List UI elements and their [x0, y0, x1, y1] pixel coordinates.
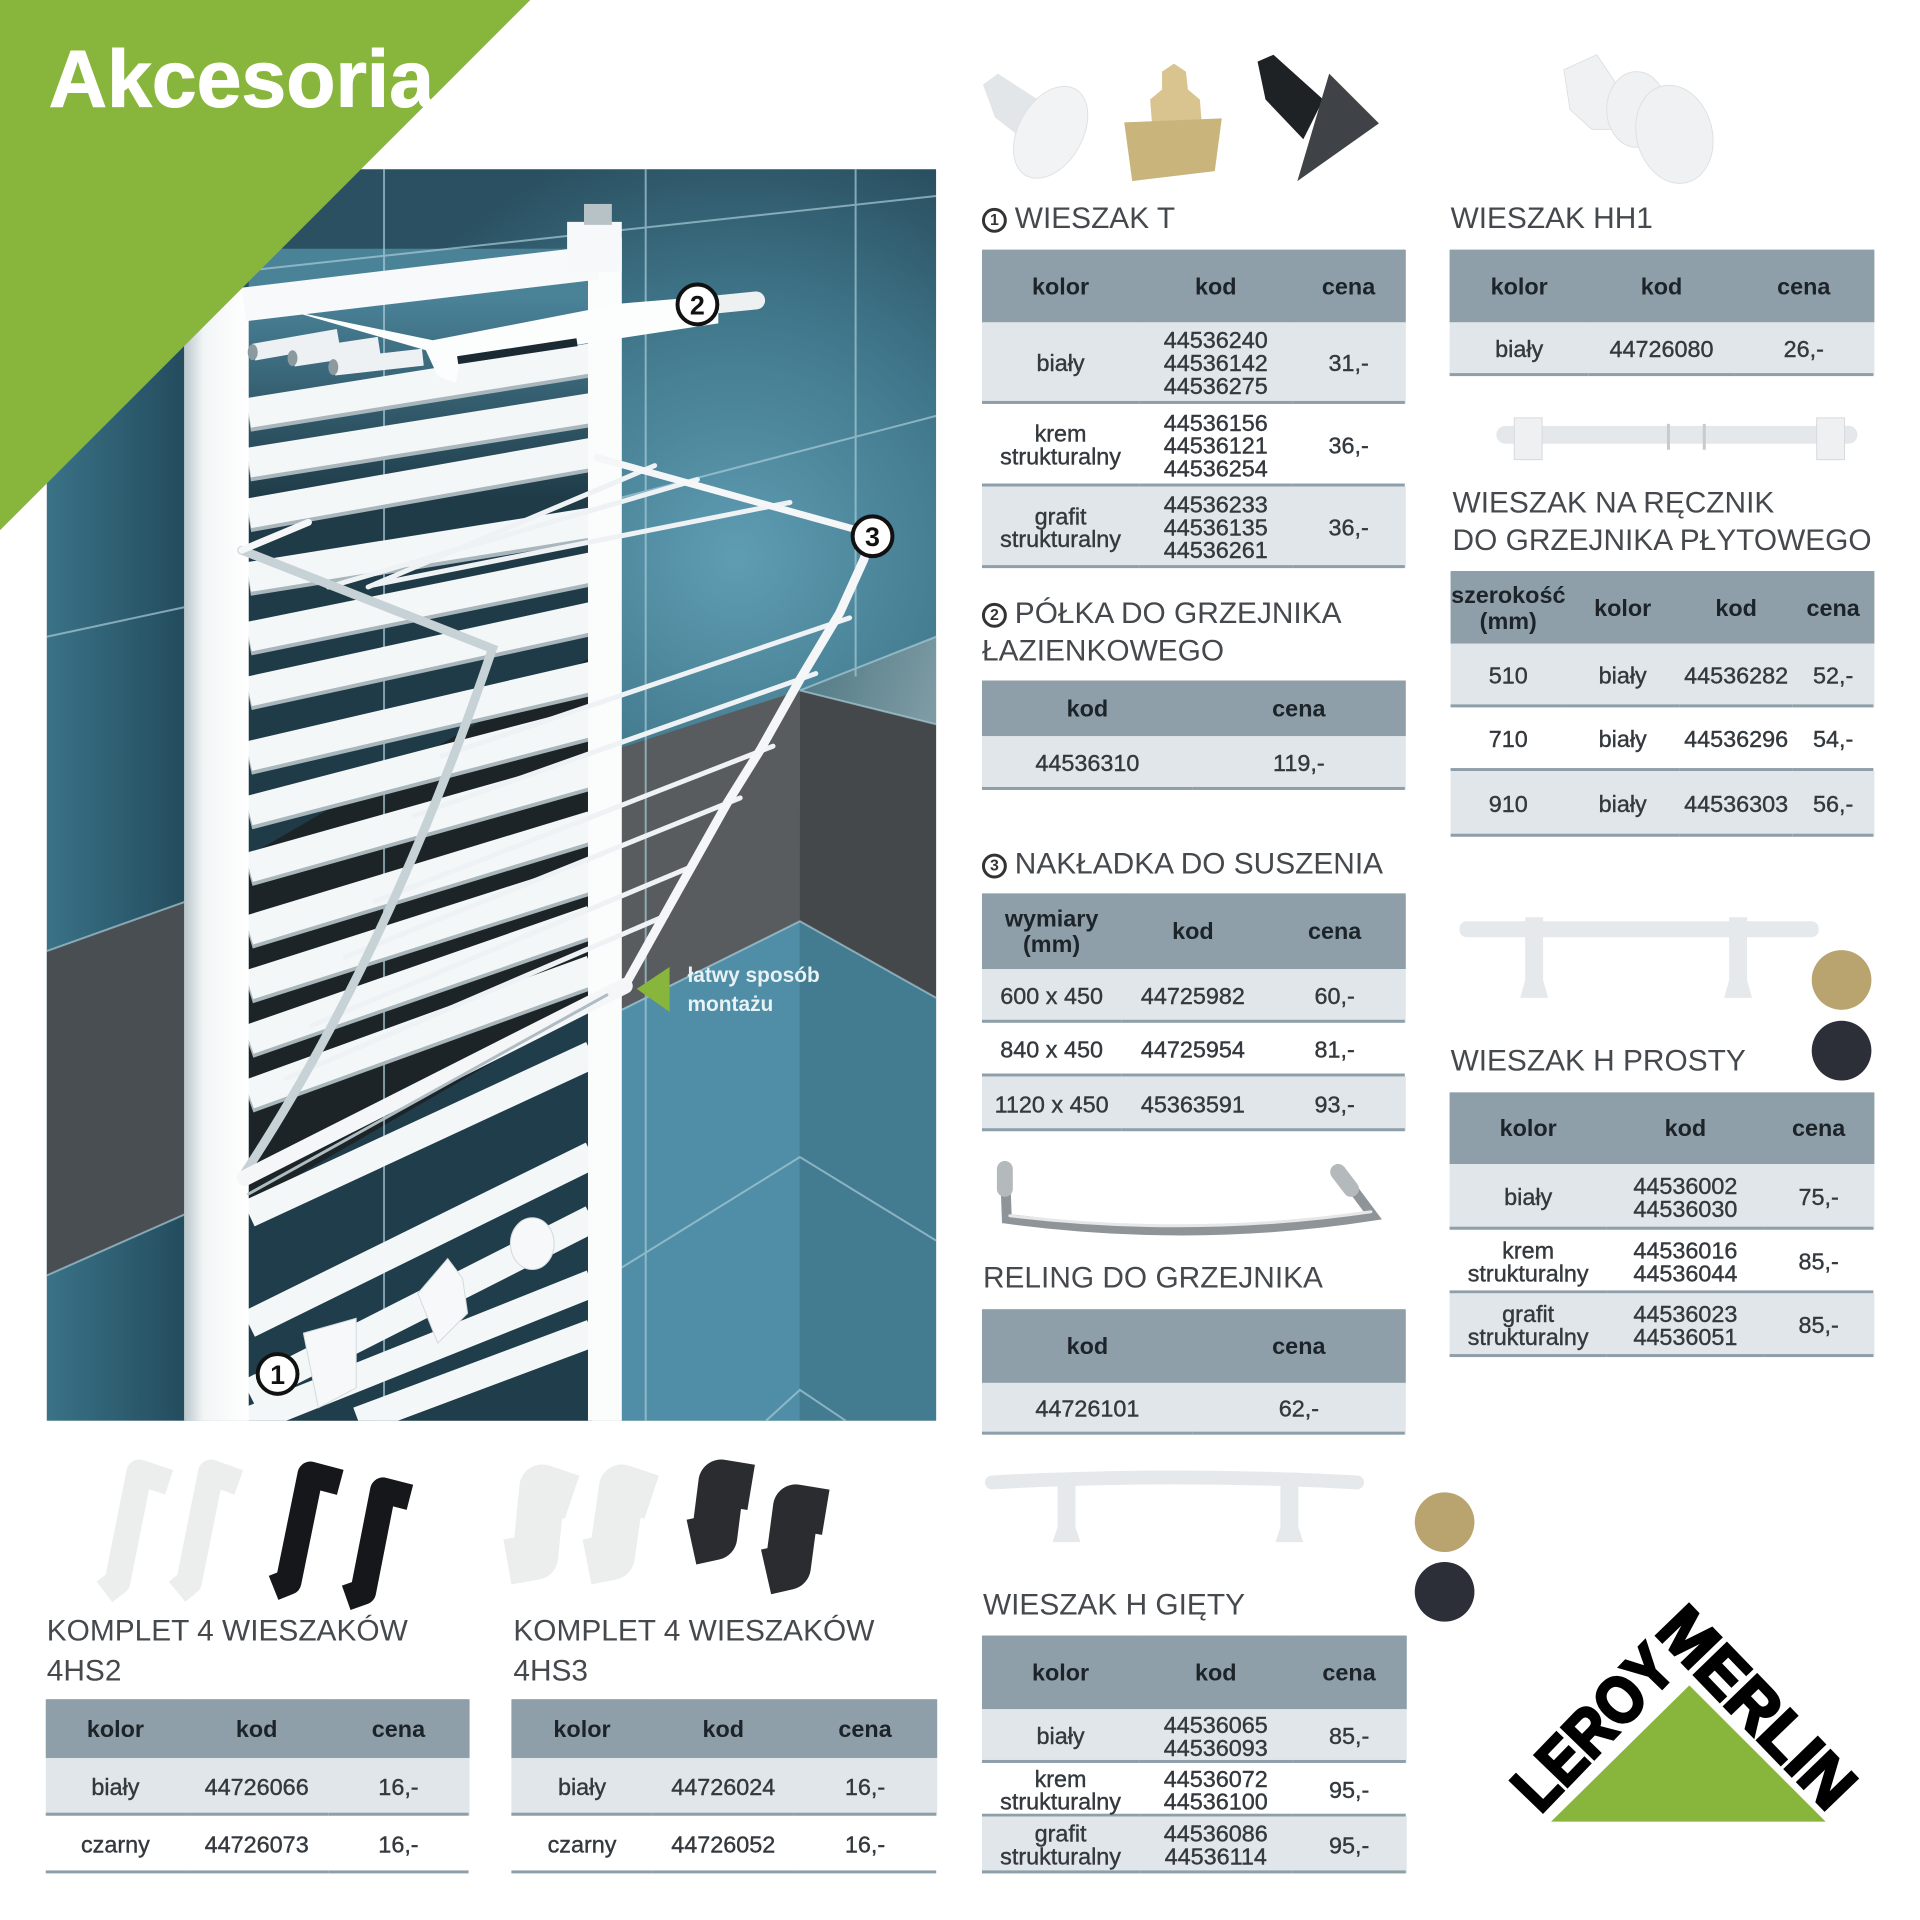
table: Wieszak na ręcznik: szerokość — [1451, 582, 1565, 607]
table: Wieszak na ręcznik: kolor — [1594, 594, 1651, 620]
icon: curved H hanger — [992, 1472, 1357, 1542]
table: Wieszak H prosty: 44536030 — [1633, 1195, 1737, 1221]
table: Wieszak na ręcznik: 56,- — [1813, 791, 1853, 817]
table: Komplet 4HS2: kolor — [87, 1716, 144, 1742]
logo: Leroy Merlin: MERLIN — [1643, 1592, 1870, 1823]
icon: white T hanger — [983, 73, 1103, 191]
table: Reling do grzejnika: kod — [1067, 1333, 1108, 1359]
table: Wieszak T: 44536233 — [1164, 491, 1268, 517]
drying rack — [242, 458, 873, 1194]
table: Wieszak T: kod — [1195, 273, 1237, 299]
table: Wieszak T: strukturalny — [1000, 526, 1121, 552]
table: Nakładka do suszenia: 81,- — [1315, 1037, 1355, 1063]
heading: Wieszak HH1: WIESZAK HH1 — [1451, 202, 1653, 235]
table: Wieszak T: 31,- — [1328, 350, 1369, 376]
icon: chrome rail — [1005, 1166, 1373, 1230]
table: Wieszak T — [982, 250, 1406, 568]
table: Wieszak H prosty — [1450, 1092, 1874, 1358]
icon: straight H hanger — [1460, 917, 1819, 998]
table: Komplet 4HS3 — [511, 1699, 938, 1874]
table: Nakładka do suszenia: (mm) — [1023, 931, 1080, 957]
table: Wieszak H gięty: kolor — [1032, 1659, 1089, 1685]
table: Komplet 4HS2: cena — [372, 1716, 425, 1742]
marker 3: 3 — [865, 522, 880, 552]
heading: Wieszak H prosty: WIESZAK H PROSTY — [1451, 1045, 1746, 1077]
table: Wieszak na ręcznik: 54,- — [1813, 726, 1853, 752]
icon: graphite T hanger — [1258, 55, 1379, 181]
table: Wieszak H prosty: 44536002 — [1633, 1172, 1737, 1198]
table: Komplet 4HS2: 16,- — [378, 1774, 419, 1800]
table: Wieszak H gięty: 44536072 — [1164, 1765, 1268, 1791]
table: Komplet 4HS2: kod — [236, 1716, 277, 1742]
table: Wieszak T: 44536261 — [1164, 537, 1268, 563]
table: Półka — [982, 680, 1406, 790]
table: Wieszak na ręcznik: (mm) — [1480, 607, 1537, 633]
table: Wieszak na ręcznik: 910 — [1489, 791, 1528, 817]
table: Wieszak H prosty: cena — [1792, 1115, 1845, 1141]
table: Komplet 4HS3: 44726052 — [671, 1832, 775, 1857]
heading: Wieszak T: WIESZAK T — [1015, 202, 1175, 235]
table: Wieszak H gięty: strukturalny — [1000, 1844, 1121, 1869]
table: Wieszak H prosty: 85,- — [1799, 1249, 1839, 1274]
table: Wieszak na ręcznik: cena — [1806, 594, 1860, 620]
table: Komplet 4HS2: 16,- — [378, 1832, 419, 1857]
table: Wieszak HH1: cena — [1777, 273, 1830, 299]
table: Komplet 4HS3: 16,- — [845, 1832, 885, 1857]
table: Półka: cena — [1272, 695, 1325, 721]
table: Wieszak H prosty: grafit — [1502, 1301, 1554, 1327]
table: Komplet 4HS2: biały — [91, 1774, 139, 1800]
table: Wieszak HH1: 26,- — [1784, 336, 1824, 362]
hangers on radiator — [303, 1218, 554, 1408]
marker 2 — [678, 285, 717, 324]
table: Nakładka do suszenia: cena — [1308, 918, 1361, 944]
table: Wieszak H gięty: strukturalny — [1000, 1788, 1121, 1814]
table: Wieszak H prosty: 75,- — [1799, 1184, 1839, 1210]
table: Wieszak na ręcznik: biały — [1599, 791, 1647, 817]
table: Komplet 4HS2: czarny — [81, 1832, 150, 1857]
table: Komplet 4HS2: 44726073 — [205, 1832, 309, 1857]
table: Wieszak H prosty: krem — [1502, 1237, 1554, 1263]
table: Wieszak H gięty: 85,- — [1329, 1723, 1369, 1749]
table: Wieszak na ręcznik — [1450, 571, 1874, 837]
table: Wieszak H prosty: 44536044 — [1633, 1260, 1737, 1286]
table: Wieszak T: krem — [1035, 421, 1087, 447]
icon: 4HS2 hooks — [104, 1472, 410, 1598]
table: Wieszak H gięty: 44536065 — [1164, 1712, 1268, 1738]
callout: easy mounting — [637, 964, 820, 1016]
table: Wieszak HH1: kolor — [1491, 273, 1548, 299]
heading: Komplet 4HS2 — [47, 1614, 408, 1687]
table: Wieszak H prosty: biały — [1504, 1184, 1552, 1210]
table: Wieszak na ręcznik: 52,- — [1813, 663, 1853, 688]
table: Nakładka do suszenia: wymiary — [1005, 905, 1098, 931]
heading: Komplet 4HS2: KOMPLET 4 WIESZAKÓW — [47, 1615, 408, 1648]
marker 1: 1 — [270, 1360, 285, 1390]
table: Wieszak H prosty: strukturalny — [1468, 1260, 1589, 1286]
table: Wieszak T: kolor — [1032, 273, 1089, 299]
heading: Wieszak na ręcznik — [1452, 487, 1872, 557]
table: Nakładka do suszenia — [982, 893, 1406, 1132]
table: Wieszak HH1: kod — [1641, 273, 1682, 299]
table: Wieszak H gięty: 95,- — [1329, 1777, 1369, 1803]
marker 2: 2 — [690, 290, 705, 320]
icon: HH1 white hanger — [1564, 55, 1724, 192]
table: Komplet 4HS3: biały — [558, 1774, 606, 1800]
table: Komplet 4HS3: kod — [703, 1716, 744, 1742]
table: Wieszak na ręcznik: 710 — [1489, 726, 1528, 752]
table: Wieszak T: 44536275 — [1164, 373, 1268, 399]
table: Wieszak H gięty: 44536093 — [1164, 1735, 1268, 1760]
table: Wieszak na ręcznik: 510 — [1489, 663, 1528, 688]
table: Komplet 4HS3: 44726024 — [671, 1774, 775, 1800]
table: Wieszak H gięty: biały — [1037, 1723, 1085, 1749]
table: Wieszak na ręcznik: 44536303 — [1684, 791, 1788, 817]
title: Akcesoria — [49, 35, 434, 124]
table: Wieszak na ręcznik: biały — [1599, 726, 1647, 752]
shelf — [248, 295, 756, 383]
table: Wieszak H gięty: cena — [1322, 1659, 1376, 1685]
table: Komplet 4HS3: cena — [838, 1716, 892, 1742]
heading: Reling do grzejnika: RELING DO GRZEJNIKA — [983, 1262, 1323, 1294]
heading: Półka: ŁAZIENKOWEGO — [982, 635, 1224, 668]
table: Półka: 119,- — [1273, 750, 1325, 776]
table: Wieszak H prosty: 44536023 — [1633, 1301, 1737, 1327]
table: Wieszak H prosty: 44536051 — [1633, 1324, 1737, 1350]
heading: Wieszak H gięty: WIESZAK H GIĘTY — [983, 1589, 1245, 1622]
table: Komplet 4HS2 — [46, 1699, 470, 1874]
heading: Komplet 4HS2: 4HS2 — [47, 1655, 121, 1687]
heading: Komplet 4HS3: KOMPLET 4 WIESZAKÓW — [513, 1615, 874, 1648]
table: Wieszak T: 36,- — [1328, 432, 1369, 458]
table: Wieszak na ręcznik: kod — [1715, 594, 1757, 620]
table: Nakładka do suszenia: 840 x 450 — [1000, 1037, 1103, 1063]
heading: Wieszak na ręcznik: WIESZAK NA RĘCZNIK — [1453, 487, 1774, 519]
table: Wieszak T: cena — [1322, 273, 1375, 299]
table: Wieszak na ręcznik: 44536282 — [1684, 663, 1788, 688]
table: Reling do grzejnika: 62,- — [1279, 1396, 1319, 1422]
radiator — [184, 204, 622, 1423]
swatches: curved H hanger colours — [1415, 1492, 1474, 1622]
table: Nakładka do suszenia: 44725954 — [1141, 1037, 1245, 1063]
table: Wieszak H gięty: 44536100 — [1164, 1788, 1268, 1814]
heading: Półka: 2 — [990, 607, 999, 624]
icon: cream T hanger — [1124, 64, 1222, 181]
heading: Nakładka do suszenia: NAKŁADKA DO SUSZENIA — [1015, 848, 1383, 880]
table: Wieszak H gięty: 44536114 — [1165, 1844, 1267, 1869]
table: Wieszak H gięty: 95,- — [1329, 1832, 1369, 1858]
table: Wieszak T: strukturalny — [1000, 444, 1121, 470]
table: Wieszak H prosty: strukturalny — [1468, 1324, 1589, 1350]
table: Wieszak na ręcznik: biały — [1599, 663, 1647, 688]
table: Wieszak HH1: biały — [1495, 336, 1543, 362]
heading: Półka: PÓŁKA DO GRZEJNIKA — [1015, 597, 1342, 630]
table: Wieszak T: biały — [1037, 350, 1085, 376]
table: Wieszak H gięty: kod — [1195, 1659, 1237, 1685]
table: Komplet 4HS3: kolor — [553, 1716, 611, 1742]
marker 3 — [853, 516, 892, 556]
table: Wieszak T: 44536121 — [1164, 432, 1268, 458]
table: Wieszak T: 36,- — [1328, 514, 1369, 540]
table: Nakładka do suszenia: 1120 x 450 — [995, 1091, 1109, 1117]
heading: Komplet 4HS3 — [513, 1614, 874, 1687]
heading: Wieszak na ręcznik: DO GRZEJNIKA PŁYTOWEGO — [1453, 524, 1872, 557]
table: Komplet 4HS3: 16,- — [845, 1774, 885, 1800]
heading: Wieszak T: 1 — [990, 212, 999, 229]
swatches: straight H hanger colours — [1812, 950, 1871, 1080]
table: Reling do grzejnika: cena — [1272, 1333, 1325, 1359]
table: Reling do grzejnika: 44726101 — [1035, 1396, 1139, 1422]
callout: easy mounting: łatwy sposób — [687, 964, 820, 987]
table: Wieszak H gięty — [982, 1636, 1407, 1874]
table: Wieszak H prosty: kod — [1665, 1115, 1706, 1141]
table: Wieszak H prosty: 44536016 — [1633, 1237, 1737, 1263]
table: Wieszak HH1: 44726080 — [1609, 336, 1713, 362]
icon: 4HS3 hooks — [507, 1482, 826, 1572]
table: Wieszak H prosty: 85,- — [1799, 1312, 1839, 1338]
table: Komplet 4HS2: 44726066 — [205, 1774, 309, 1800]
table: Półka: 44536310 — [1035, 750, 1139, 776]
heading: Półka — [982, 597, 1342, 668]
table: Nakładka do suszenia: 93,- — [1315, 1091, 1355, 1117]
table: Wieszak H gięty: grafit — [1035, 1821, 1087, 1847]
table: Nakładka do suszenia: 45363591 — [1141, 1091, 1245, 1117]
table: Nakładka do suszenia: kod — [1172, 918, 1214, 944]
table: Wieszak T: 44536254 — [1164, 455, 1268, 481]
table: Wieszak HH1 — [1450, 250, 1874, 376]
table: Półka: kod — [1067, 695, 1108, 721]
table: Komplet 4HS3: czarny — [548, 1832, 616, 1857]
table: Nakładka do suszenia: 600 x 450 — [1000, 983, 1103, 1009]
table: Nakładka do suszenia: 44725982 — [1141, 983, 1245, 1009]
table: Reling do grzejnika — [982, 1309, 1406, 1435]
table: Nakładka do suszenia: 60,- — [1315, 983, 1355, 1009]
heading: Komplet 4HS3: 4HS3 — [513, 1655, 588, 1687]
table: Wieszak H prosty: kolor — [1500, 1115, 1557, 1141]
heading: Nakładka do suszenia: 3 — [990, 858, 999, 875]
table: Wieszak T: 44536240 — [1164, 327, 1268, 353]
table: Wieszak na ręcznik: 44536296 — [1684, 726, 1788, 752]
logo: Leroy Merlin: LEROY — [1498, 1631, 1688, 1824]
table: Wieszak H gięty: 44536086 — [1164, 1821, 1268, 1847]
marker 1 — [258, 1354, 297, 1394]
table: Wieszak T: 44536142 — [1164, 350, 1268, 376]
table: Wieszak T: 44536156 — [1164, 409, 1268, 435]
logo: Leroy Merlin — [1498, 1592, 1870, 1824]
table: Wieszak T: grafit — [1035, 503, 1087, 529]
icon: towel hanger rail — [1496, 418, 1857, 460]
table: Wieszak T: 44536135 — [1164, 514, 1268, 540]
callout: easy mounting: montażu — [687, 993, 773, 1016]
green corner triangle — [0, 0, 530, 530]
table: Wieszak H gięty: krem — [1035, 1765, 1087, 1791]
